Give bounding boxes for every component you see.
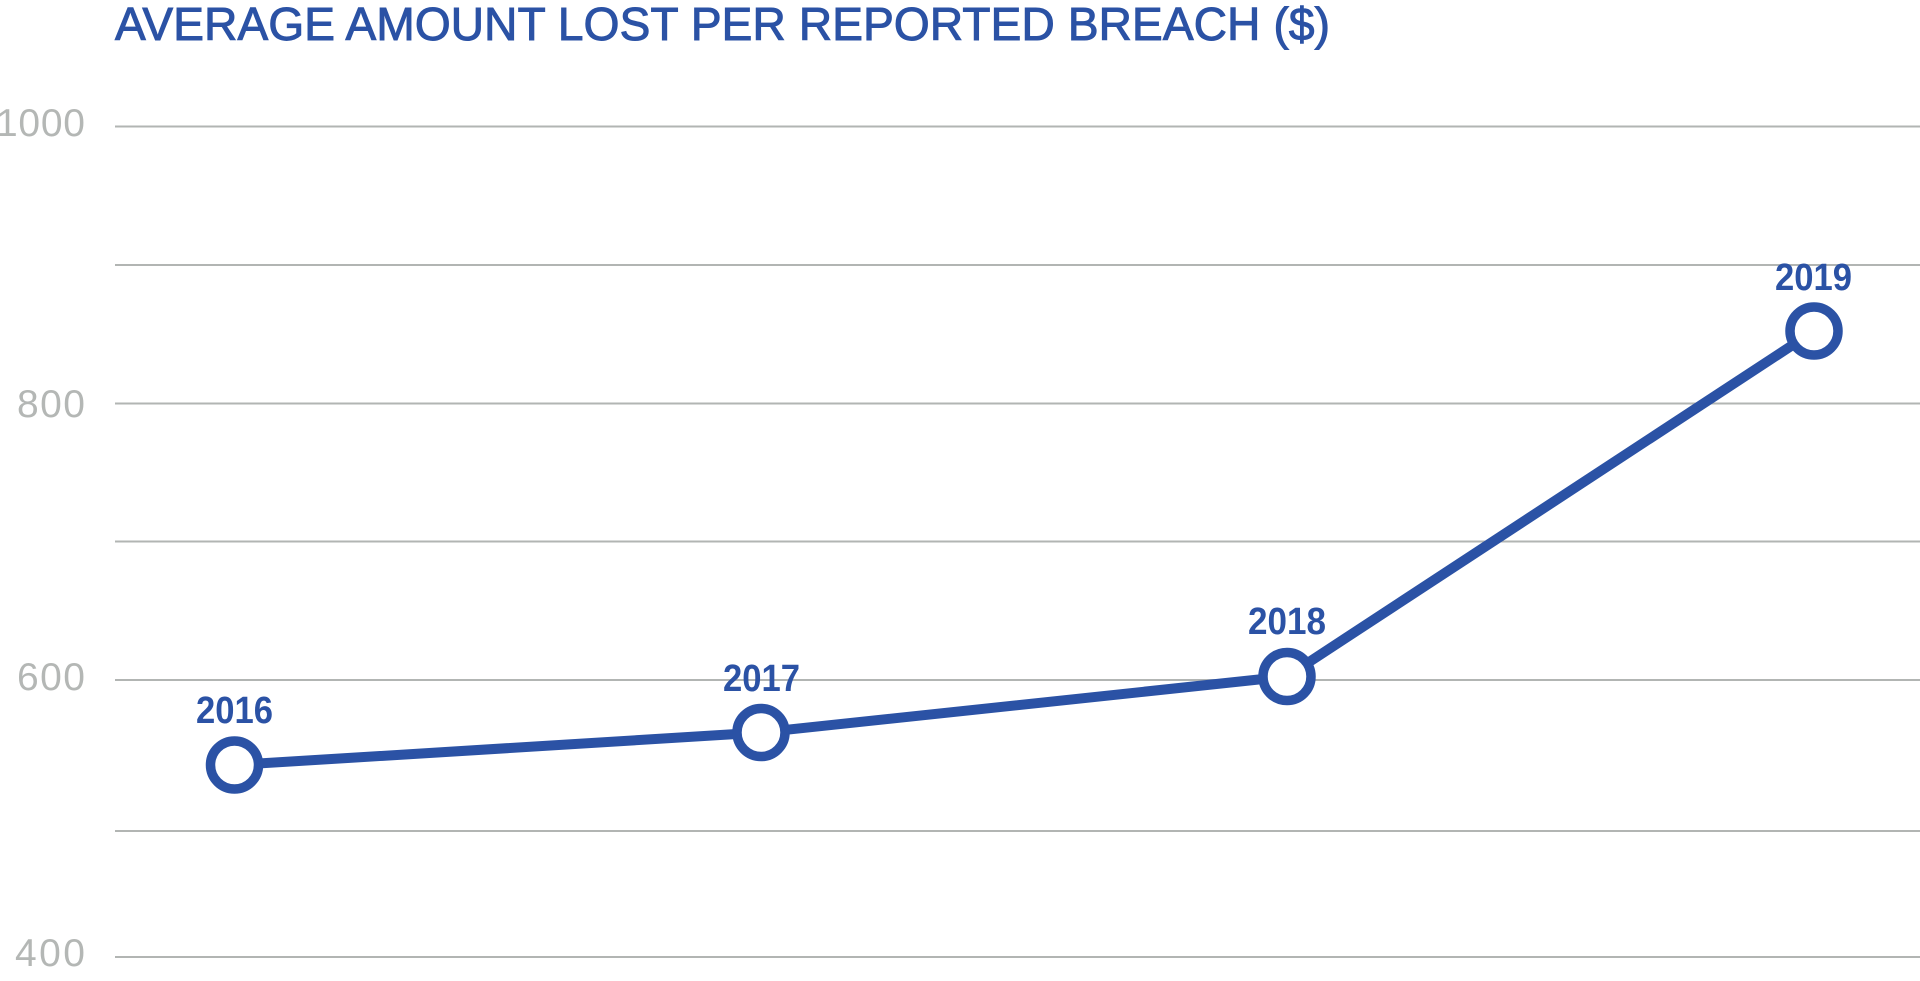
data point 2017: 2017 (723, 658, 800, 700)
y-axis label 800: 800 (17, 383, 85, 426)
data point 2017 (723, 658, 800, 756)
data point 2018: 2018 (1248, 601, 1326, 643)
data point 2016 (196, 690, 273, 789)
y-axis label 400: 400 (15, 932, 85, 975)
data point 2019 (1775, 257, 1852, 355)
data point 2019: 2019 (1775, 257, 1852, 299)
y-axis labels (0, 102, 85, 975)
data line (234, 331, 1814, 765)
data point 2018 (1248, 601, 1326, 700)
data point 2016: 2016 (196, 690, 273, 732)
y-axis label 600: 600 (17, 656, 85, 699)
